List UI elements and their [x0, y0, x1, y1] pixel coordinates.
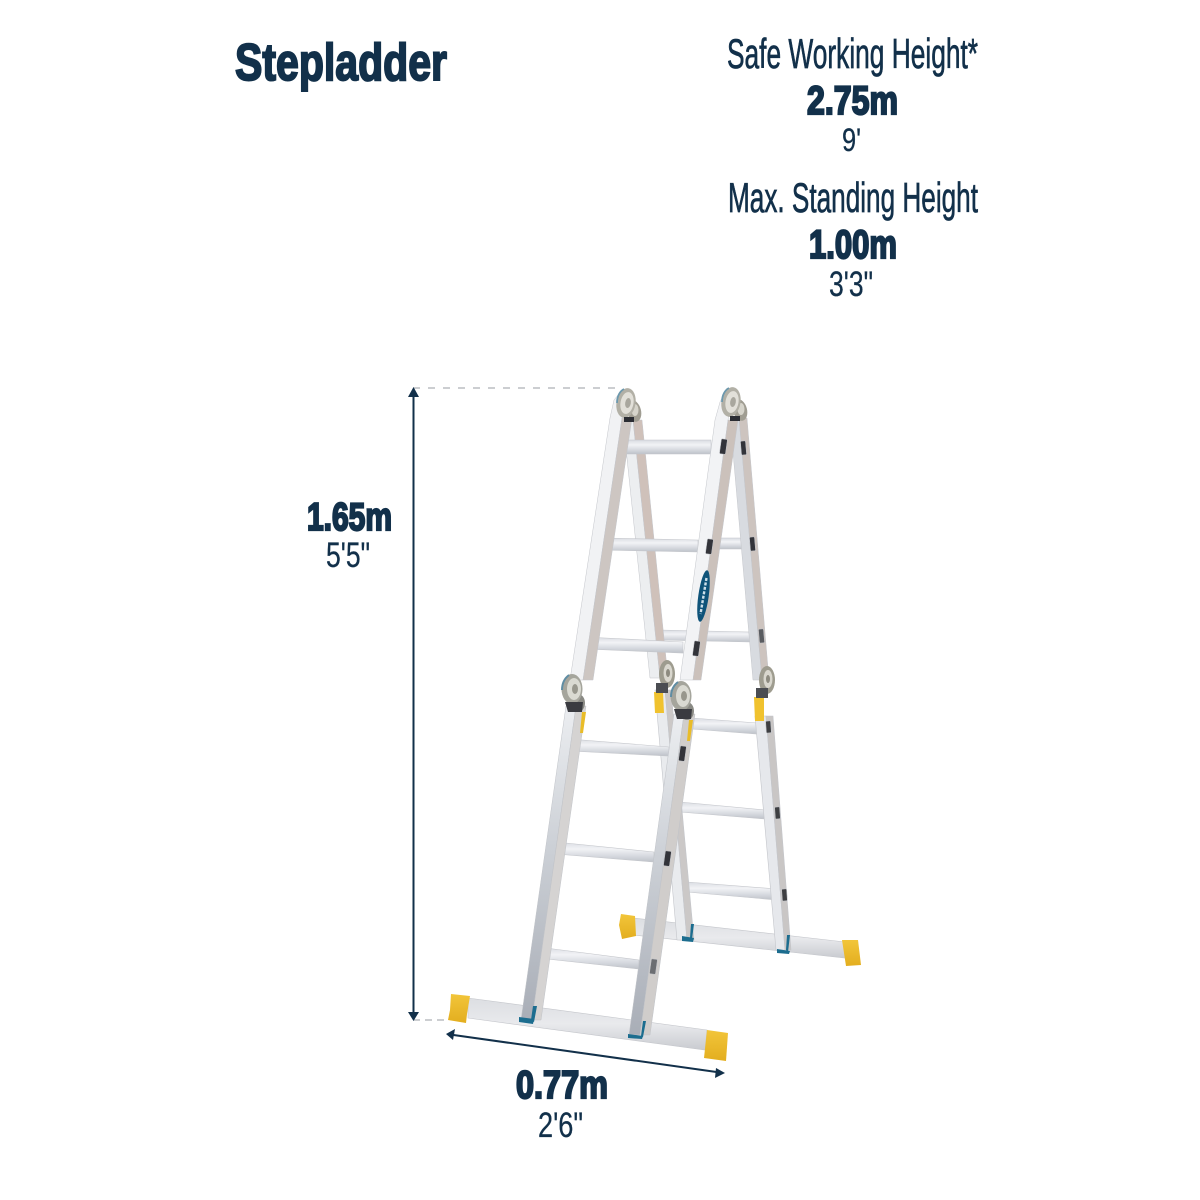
width metric value: 0.77m	[516, 1064, 608, 1107]
safe working height imperial value: 9'	[842, 122, 861, 158]
icon: blue brand logo badge	[695, 570, 712, 622]
lower front rungs	[538, 739, 669, 969]
title: Stepladder	[235, 34, 447, 92]
upper front rungs	[585, 440, 711, 653]
back stabiliser bar	[619, 914, 861, 966]
back lower rails and rungs	[655, 690, 791, 950]
blue rail feet clips	[519, 924, 790, 1039]
max standing height block	[728, 174, 978, 304]
safe working height label: Safe Working Height*	[727, 30, 978, 77]
height dimension line	[408, 387, 620, 1021]
safe working height metric value: 2.75m	[807, 79, 898, 123]
top hinges	[614, 386, 750, 423]
height dimension text	[307, 496, 392, 575]
lower hinges with yellow locks	[562, 660, 775, 741]
safe working height block	[727, 30, 978, 158]
upper section rungs	[659, 441, 750, 642]
max standing height imperial value: 3'3"	[829, 265, 873, 304]
stepladder illustration	[448, 386, 861, 1061]
width dimension text	[516, 1064, 608, 1145]
width dimension arrow	[446, 1029, 725, 1078]
front stabiliser bar	[448, 994, 728, 1061]
height metric value: 1.65m	[307, 496, 392, 539]
max standing height label: Max. Standing Height	[728, 174, 978, 221]
upper front rails	[570, 388, 738, 680]
max standing height metric value: 1.00m	[809, 223, 897, 267]
lower front rails	[521, 706, 695, 1035]
upper back rails	[623, 418, 769, 680]
height imperial value: 5'5"	[326, 536, 370, 575]
width imperial value: 2'6"	[538, 1106, 583, 1145]
